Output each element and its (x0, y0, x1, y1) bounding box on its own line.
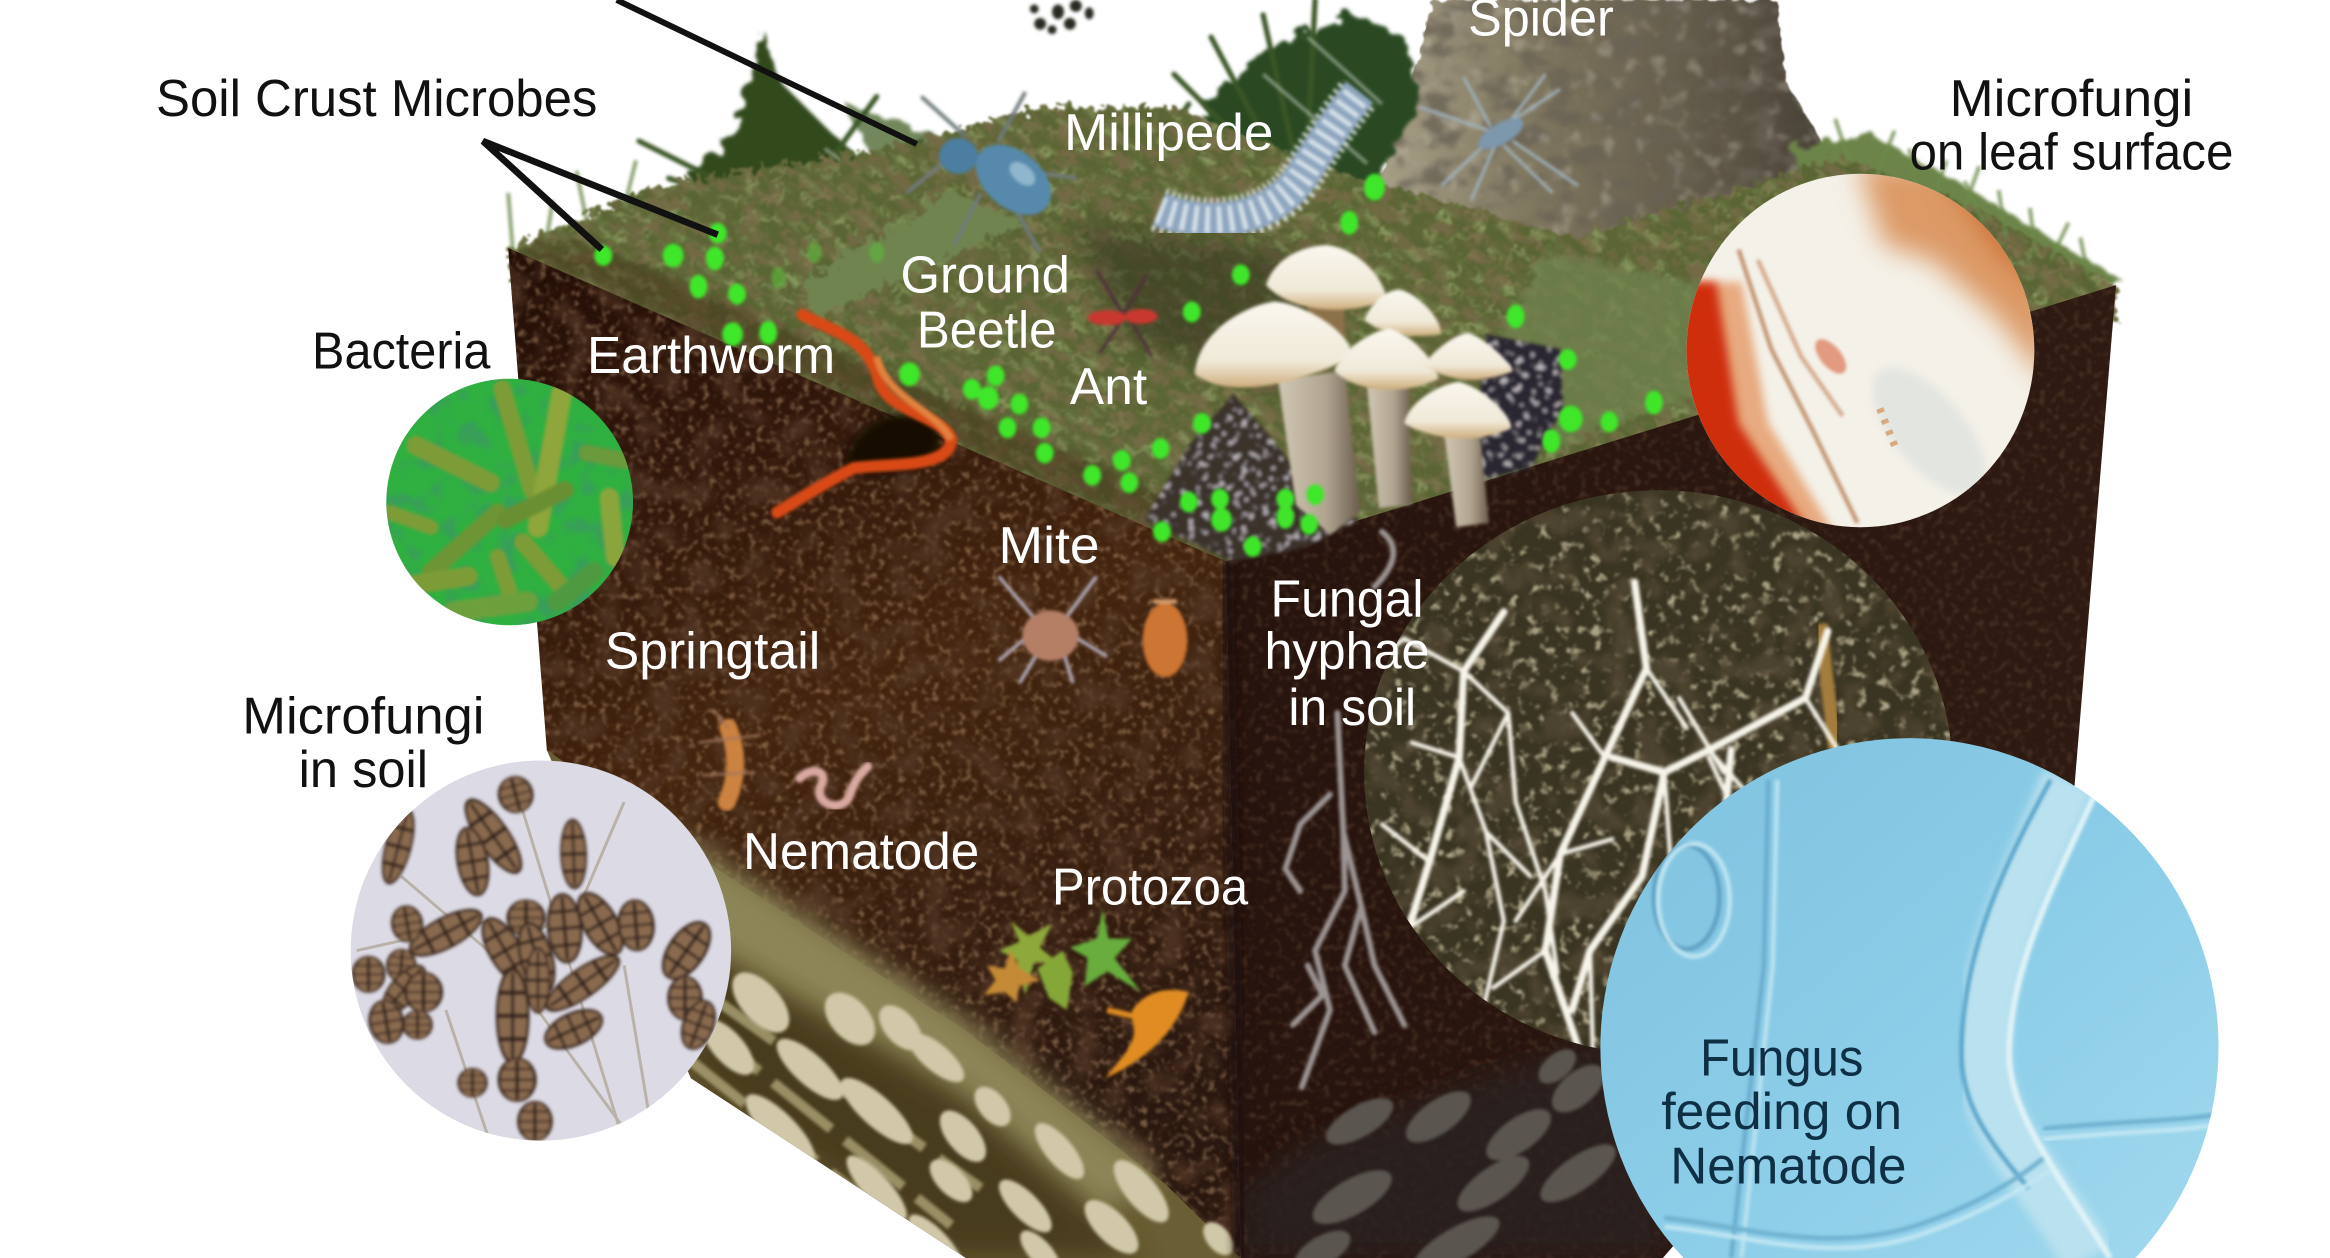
label: springtail: Springtail (605, 622, 820, 680)
icon: orange mite (1143, 602, 1187, 677)
label: fungal hyphae in soil (1265, 570, 1430, 737)
label leader: soil crust microbes (483, 141, 718, 250)
circle: bacteria micrograph (383, 376, 639, 631)
right soil face (1218, 282, 2125, 1258)
circle: fungus feeding on nematode (1600, 738, 2219, 1258)
label: protozoa: Protozoa (1052, 859, 1248, 917)
label: mite: Mite (999, 517, 1100, 575)
label: microfungi in soil: Microfungi (242, 688, 484, 746)
label: microfungi in soil (242, 688, 484, 799)
label: ground beetle: Beetle (917, 302, 1057, 360)
ferns and grass at back (639, 0, 2125, 319)
label leader: ground beetle (617, 0, 917, 144)
label: fungal hyphae in soil: in soil (1288, 679, 1416, 737)
circle: fungal hyphae in soil (1360, 483, 1961, 1062)
grass top surface (490, 89, 2140, 609)
left soil face (490, 238, 1248, 1258)
label: ant: Ant (1070, 358, 1148, 416)
label: bacteria: Bacteria (312, 322, 490, 380)
label: fungus feeding on nematode: feeding on (1661, 1083, 1902, 1141)
label: microfungi on leaf surface (1909, 70, 2233, 181)
label: fungus feeding on nematode: Fungus (1700, 1029, 1863, 1087)
label: fungus feeding on nematode: Nematode (1670, 1138, 1906, 1196)
dark droppings at top (1030, 0, 1094, 34)
icon: ground beetle (906, 92, 1077, 252)
mushrooms (1195, 245, 1513, 535)
icon: springtail (698, 710, 761, 802)
label: microfungi on leaf surface: on leaf surface (1909, 123, 2233, 181)
right rock layer (1241, 1025, 1664, 1258)
label: fungal hyphae in soil: hyphae (1265, 622, 1430, 680)
white labels (587, 0, 1614, 917)
grass blades at rear edge (508, 119, 2088, 275)
label: fungus feeding on nematode (1661, 1029, 1906, 1196)
earthworm and burrow (777, 315, 951, 512)
label: earthworm: Earthworm (587, 327, 835, 385)
black labels (156, 70, 2233, 799)
circle: microfungi in soil (351, 760, 731, 1144)
circle: microfungi on leaf surface (1686, 174, 2034, 528)
corner edge shadow (1226, 561, 1241, 1258)
label: millipede: Millipede (1064, 104, 1273, 162)
gravel mounds (1144, 334, 1563, 561)
icon: millipede (1159, 92, 1360, 220)
label: ground beetle (900, 247, 1070, 360)
label: soil crust microbes: Soil Crust Microbes (156, 70, 597, 128)
icon: mite (999, 576, 1107, 683)
icon: ant (1088, 270, 1158, 356)
tree trunk (1378, 0, 1822, 241)
label: microfungi in soil: in soil (299, 741, 428, 799)
icon: spider (1419, 74, 1578, 201)
label: nematode: Nematode (743, 823, 979, 881)
nematode body (1961, 780, 2110, 1258)
label: fungal hyphae in soil: Fungal (1271, 570, 1424, 628)
icon: protozoa (984, 909, 1189, 1078)
soil crust microbe dots (594, 174, 1663, 557)
label: ground beetle: Ground (900, 247, 1070, 305)
label: microfungi on leaf surface: Microfungi (1950, 70, 2193, 128)
rock layer (547, 750, 1241, 1258)
faint crust dots (771, 242, 884, 288)
panel: soil cube (490, 0, 2140, 1258)
icon: nematode (799, 766, 868, 805)
fungal hyphae on soil face (1285, 532, 1404, 1087)
